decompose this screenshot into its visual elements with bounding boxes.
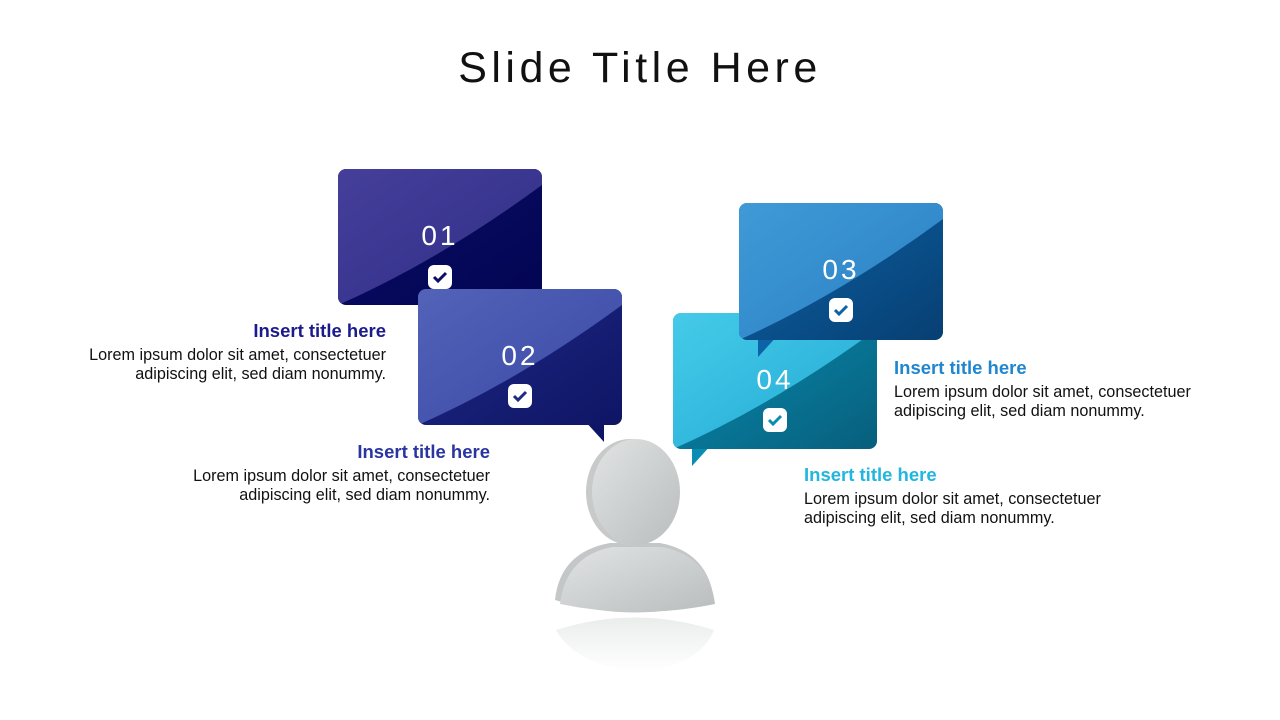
text block 03: adipiscing elit, sed diam nonummy. xyxy=(894,402,1145,420)
bubble 04 xyxy=(673,313,877,466)
text block 04 xyxy=(804,464,1101,527)
diagram xyxy=(338,169,943,650)
bubble 02 xyxy=(418,289,622,442)
text block 02: Lorem ipsum dolor sit amet, consectetuer xyxy=(193,467,490,485)
bubble 04: 04 xyxy=(756,364,794,395)
text block 04: adipiscing elit, sed diam nonummy. xyxy=(804,509,1055,527)
text block 03: Insert title here xyxy=(894,357,1027,378)
text block 01 xyxy=(89,320,386,383)
text block 02: Insert title here xyxy=(357,441,490,462)
text block 02: adipiscing elit, sed diam nonummy. xyxy=(239,486,490,504)
text block 04: Insert title here xyxy=(804,464,937,485)
text block 02 xyxy=(193,441,490,504)
text block 04: Lorem ipsum dolor sit amet, consectetuer xyxy=(804,490,1101,508)
text block 03: Lorem ipsum dolor sit amet, consectetuer xyxy=(894,383,1191,401)
bubble 01 xyxy=(338,169,542,305)
bubble 01: 01 xyxy=(421,220,459,251)
text block 01: Insert title here xyxy=(253,320,386,341)
bubble 02: 02 xyxy=(501,340,539,371)
bubble 03: 03 xyxy=(822,254,860,285)
text block 01: adipiscing elit, sed diam nonummy. xyxy=(135,365,386,383)
text block 03 xyxy=(894,357,1191,420)
title: Slide Title Here xyxy=(458,44,822,92)
bubble 03 xyxy=(739,203,943,357)
icon: person xyxy=(555,439,715,672)
text block 01: Lorem ipsum dolor sit amet, consectetuer xyxy=(89,346,386,364)
